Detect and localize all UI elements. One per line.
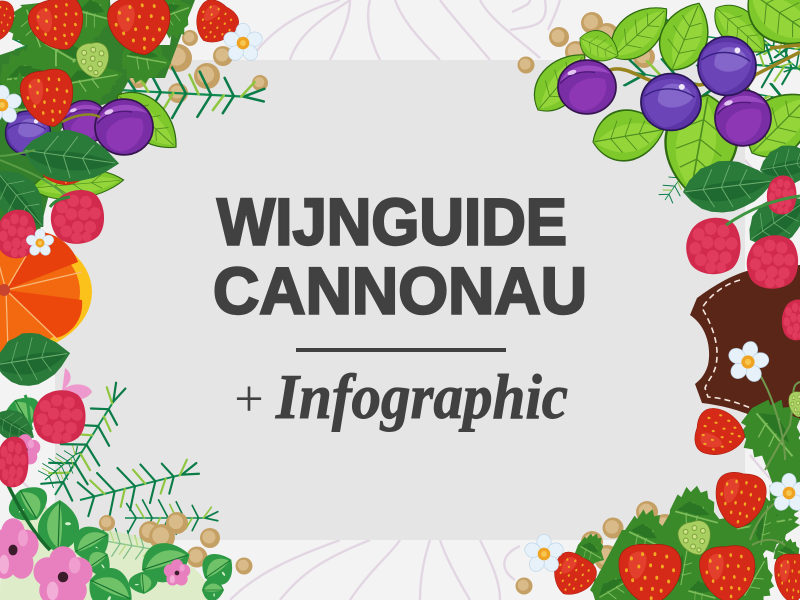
- raspberries: [0, 188, 106, 258]
- title text block: [213, 184, 587, 328]
- orange slice: [0, 229, 92, 355]
- bright green leaves: [31, 80, 190, 203]
- rosemary sprigs: [617, 8, 800, 206]
- branch: [610, 45, 800, 98]
- pale leaves wash: [0, 505, 215, 600]
- small pink flower top: [62, 368, 92, 400]
- strawberries: [0, 0, 244, 185]
- pink flowers: [0, 518, 190, 600]
- mint leaves: [0, 124, 123, 240]
- strawberry stems: [750, 375, 800, 545]
- corner: bottom-right strawberry cluster: [516, 338, 800, 600]
- raspberries: [686, 176, 800, 340]
- plums: [5, 99, 153, 155]
- leather swatch: [690, 265, 800, 420]
- hazelnuts: [518, 12, 670, 74]
- plums: [558, 37, 771, 146]
- corner: top-left fruit cluster: [0, 0, 268, 355]
- dark green leaves: [0, 0, 201, 148]
- hazelnuts: [128, 30, 268, 103]
- corner: bottom-left flower cluster: [0, 326, 253, 600]
- title: wijnguide: WIJNGUIDE: [217, 184, 567, 258]
- green foliage backdrop: [590, 415, 800, 600]
- unripe strawberries: [675, 392, 800, 559]
- mint leaf: [680, 155, 777, 217]
- white blossoms: [523, 338, 800, 574]
- hazelnuts: [99, 512, 252, 574]
- green foliage backdrop: [0, 0, 195, 235]
- plus sign: +: [231, 371, 266, 428]
- grey title panel: [55, 60, 745, 540]
- strawberries: [544, 405, 800, 600]
- hazelnuts: [516, 501, 708, 594]
- dark leaves: [737, 140, 800, 258]
- raspberries and mint: [0, 326, 86, 487]
- green leaves: [522, 0, 800, 200]
- infographic word: Infographic: [275, 362, 568, 432]
- rosemary sprigs: [10, 1, 265, 123]
- rosemary sprigs: [36, 375, 218, 566]
- title: cannonau: CANNONAU: [213, 254, 587, 328]
- subtitle: [231, 362, 568, 432]
- corner: top-right plum cluster: [518, 0, 800, 420]
- divider line: [296, 348, 506, 352]
- white blossoms: [0, 23, 264, 258]
- strawberry leaves: [568, 387, 800, 600]
- glossy green leaves: [0, 391, 241, 600]
